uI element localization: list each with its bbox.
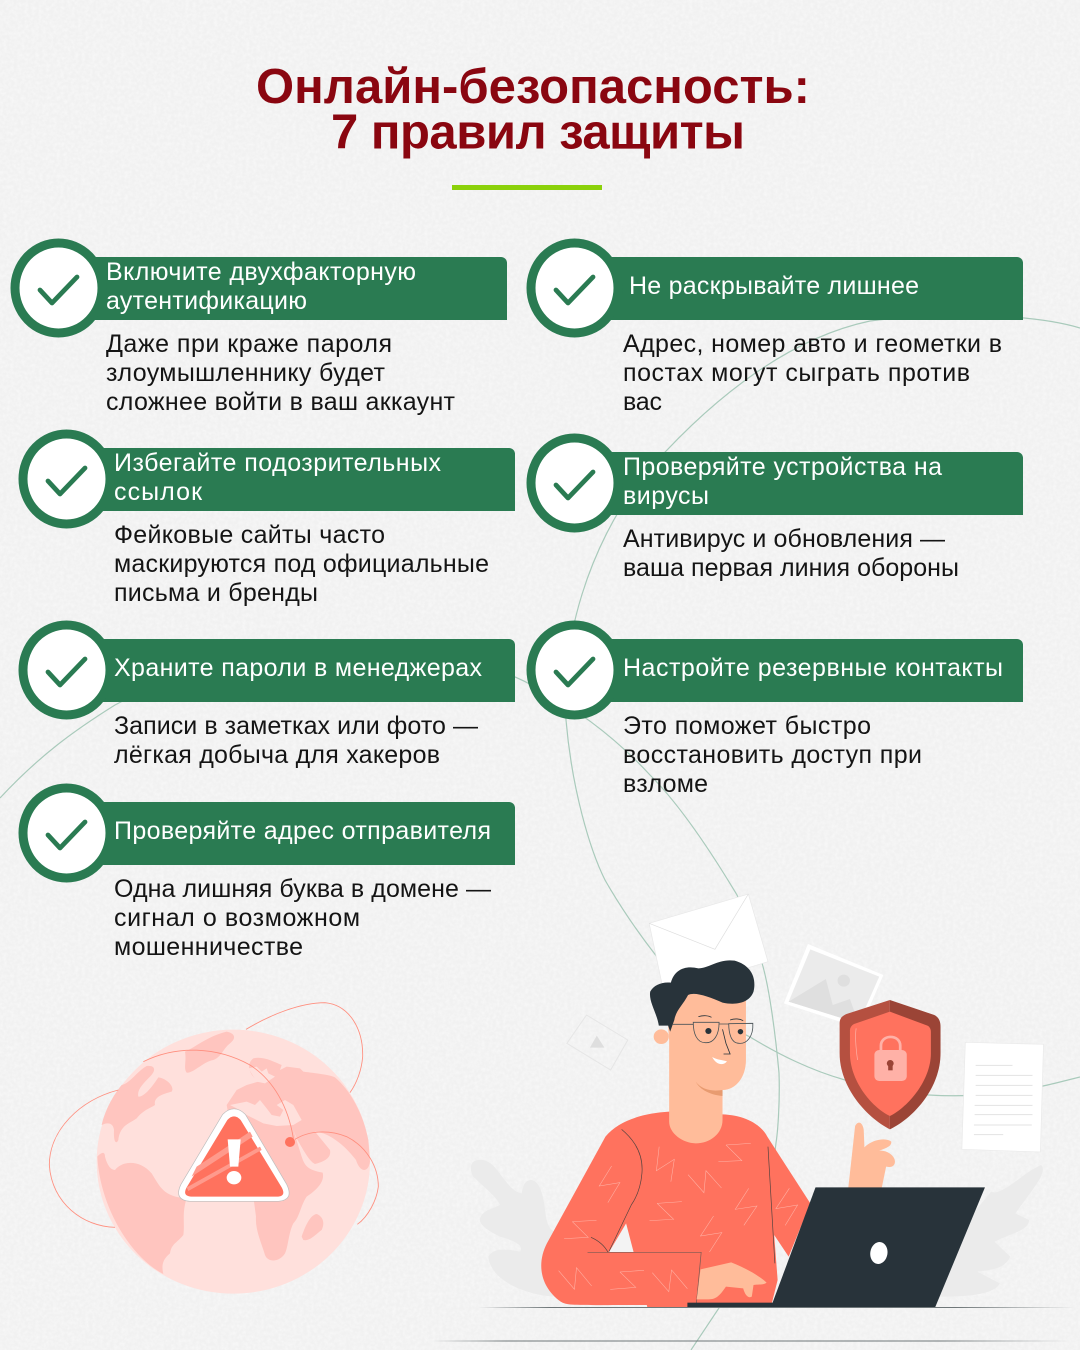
- panel: rule 4 sender address: сигнал о возможном: [114, 904, 360, 932]
- panel: rule 7 backup contacts: Настройте резервные контакты: [623, 654, 1003, 682]
- panel: rule 7 backup contacts: Это поможет быстро: [623, 712, 871, 740]
- panel: rule 6 check devices for viruses: Антивирус и обновления —: [623, 525, 945, 553]
- panel: rule 3 password managers: Храните пароли в менеджерах: [114, 654, 482, 682]
- panel: rule 3 password managers: [23, 625, 515, 769]
- sleeve cuff: [588, 1252, 701, 1308]
- neck and face: [668, 993, 746, 1143]
- illustration: globe with warning sign: [49, 1003, 378, 1294]
- panel: rule 2 suspicious links: [23, 434, 515, 607]
- panel: rule 1 two-factor authentication: аутентификацию: [106, 287, 307, 315]
- shield with lock: [840, 1000, 941, 1129]
- small faded card: [567, 1015, 628, 1070]
- panel: rule 1 two-factor authentication: сложнее войти в ваш аккаунт: [106, 388, 456, 416]
- panel: rule 6 check devices for viruses: вирусы: [623, 482, 709, 510]
- leaf left background: [471, 1160, 555, 1297]
- panel: rule 1 two-factor authentication: злоумышленнику будет: [106, 359, 386, 387]
- panel: rule 6 check devices for viruses: ваша первая линия обороны: [623, 554, 959, 582]
- panel: rule 5 do not overshare: Не раскрывайте лишнее: [629, 272, 919, 300]
- panel: rule 5 do not overshare: постах могут сыграть против: [623, 359, 970, 387]
- illustration: man with laptop and security shield: [541, 894, 1043, 1308]
- panel: rule 7 backup contacts: взломе: [623, 770, 708, 798]
- panel: rule 2 suspicious links: маскируются под официальные: [114, 550, 489, 578]
- panel: rule 6 check devices for viruses: [531, 438, 1023, 582]
- laptop: [687, 1187, 985, 1308]
- panel: rule 7 backup contacts: восстановить доступ при: [623, 741, 922, 769]
- floating envelope: [649, 894, 768, 993]
- floating document: [962, 1042, 1043, 1152]
- far arm and sweater: [541, 1112, 810, 1308]
- panel: rule 4 sender address: [23, 788, 515, 961]
- sweater zigzag pattern: [559, 1143, 798, 1292]
- panel: rule 4 sender address: Одна лишняя буква в домене —: [114, 875, 491, 903]
- panel: rule 1 two-factor authentication: Даже при краже пароля: [106, 330, 392, 358]
- title: Онлайн-безопасность:: [256, 60, 810, 114]
- panel: rule 7 backup contacts: [531, 625, 1023, 798]
- panel: rule 2 suspicious links: Избегайте подозрительных: [114, 449, 442, 477]
- glasses: [673, 1022, 753, 1043]
- panel: rule 1 two-factor authentication: [15, 243, 507, 416]
- panel: rule 5 do not overshare: Адрес, номер авто и геометки в: [623, 330, 1002, 358]
- panel: rule 1 two-factor authentication: Включите двухфакторную: [106, 258, 416, 286]
- leaf right background: [939, 1165, 1043, 1297]
- floating image card: [784, 944, 883, 1028]
- title: [256, 60, 810, 160]
- panel: rule 6 check devices for viruses: Проверяйте устройства на: [623, 453, 942, 481]
- pointing hand: [848, 1123, 895, 1188]
- panel: rule 4 sender address: мошенничестве: [114, 933, 303, 961]
- panel: rule 4 sender address: Проверяйте адрес отправителя: [114, 817, 491, 845]
- panel: rule 2 suspicious links: письма и бренды: [114, 579, 318, 607]
- panel: rule 2 suspicious links: Фейковые сайты часто: [114, 521, 385, 549]
- desk lines: [430, 1307, 1075, 1342]
- panel: rule 5 do not overshare: [531, 243, 1023, 416]
- title: 7 правил защиты: [331, 106, 745, 160]
- panel: rule 2 suspicious links: ссылок: [114, 478, 203, 506]
- panel: rule 3 password managers: лёгкая добыча для хакеров: [114, 741, 440, 769]
- typing hand: [697, 1262, 767, 1299]
- panel: rule 5 do not overshare: вас: [623, 388, 662, 416]
- hair: [650, 960, 754, 1032]
- panel: rule 3 password managers: Записи в заметках или фото —: [114, 712, 478, 740]
- title accent line: [452, 185, 602, 190]
